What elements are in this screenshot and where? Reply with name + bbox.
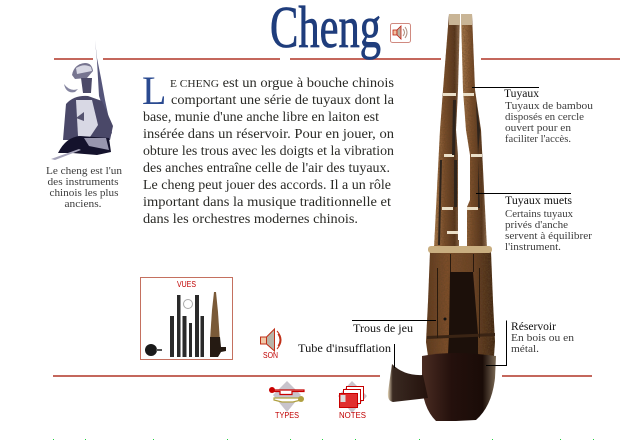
label: tuyaux: disposés en cercle [505,111,584,123]
label: trous de jeu: Trous de jeu [353,321,413,335]
mouthpiece [388,364,428,402]
caption [46,165,123,210]
label: tube d'insufflation [298,341,394,368]
band [428,246,492,253]
caption: Le cheng est l'un [46,165,123,177]
vues thumbnail panel [140,278,232,360]
body text: dans les orchestres modernes chinois. [143,212,358,227]
icon: title speaker [390,24,410,42]
body text: obture les trous avec les doigts et la vibration [143,144,394,159]
body text: comportant une série de tuyaux dont la [171,93,395,108]
label: tube d'insufflation: Tube d'insufflation [298,341,391,355]
illustration: cheng instrument [388,14,496,421]
vues thumbnail panel: VUES [177,280,196,289]
label: réservoir [486,319,575,366]
label: tuyaux muets [476,193,592,253]
caption: des instruments [48,176,118,188]
label: tuyaux muets: servent à équilibrer [505,230,592,242]
label: tuyaux: Tuyaux de bambou [505,100,594,112]
label: tuyaux muets: l'instrument. [505,241,561,253]
body text: base, munie d'une anche libre en laiton est [143,110,379,125]
body text: Le cheng peut jouer des accords. Il a un rôle [143,178,391,193]
icon: son [260,329,281,360]
reservoir bowl [422,353,496,421]
body text: insérée dans un réservoir. Pour en jouer, on [143,127,394,142]
label: tuyaux: Tuyaux [504,86,539,100]
body text: important dans la musique traditionnelle et [143,195,391,210]
label: réservoir: Réservoir [511,319,556,333]
label: tuyaux muets: Tuyaux muets [505,193,572,207]
upper pipes [434,14,487,248]
icon: notes: NOTES [339,411,366,420]
body text: des anches entraîne celle de l'air des tuyaux. [143,161,390,176]
icon: son: SON [263,351,278,360]
drop cap: L [142,68,166,113]
label: tuyaux muets: privés d'anche [505,219,568,231]
label: tuyaux muets: Certains tuyaux [505,208,573,220]
wind chest body [426,252,495,356]
green edge dots [53,439,594,440]
caption: anciens. [64,198,102,210]
page rules [53,58,620,377]
body text: E CHENG est un orgue à bouche chinois [170,76,394,91]
icon: types: TYPES [275,411,299,420]
icon: types [269,381,304,420]
caption: chinois les plus [50,187,118,199]
label: réservoir: En bois ou en [511,332,575,344]
icon: notes [338,381,367,420]
label: réservoir: métal. [511,343,539,355]
label: tuyaux [472,86,594,145]
illustration: musician playing the cheng [51,40,113,160]
label: tuyaux: faciliter l'accès. [505,133,571,145]
label: trous de jeu [352,320,436,335]
body text [142,68,395,227]
label: tuyaux: ouvert pour en [505,122,572,134]
